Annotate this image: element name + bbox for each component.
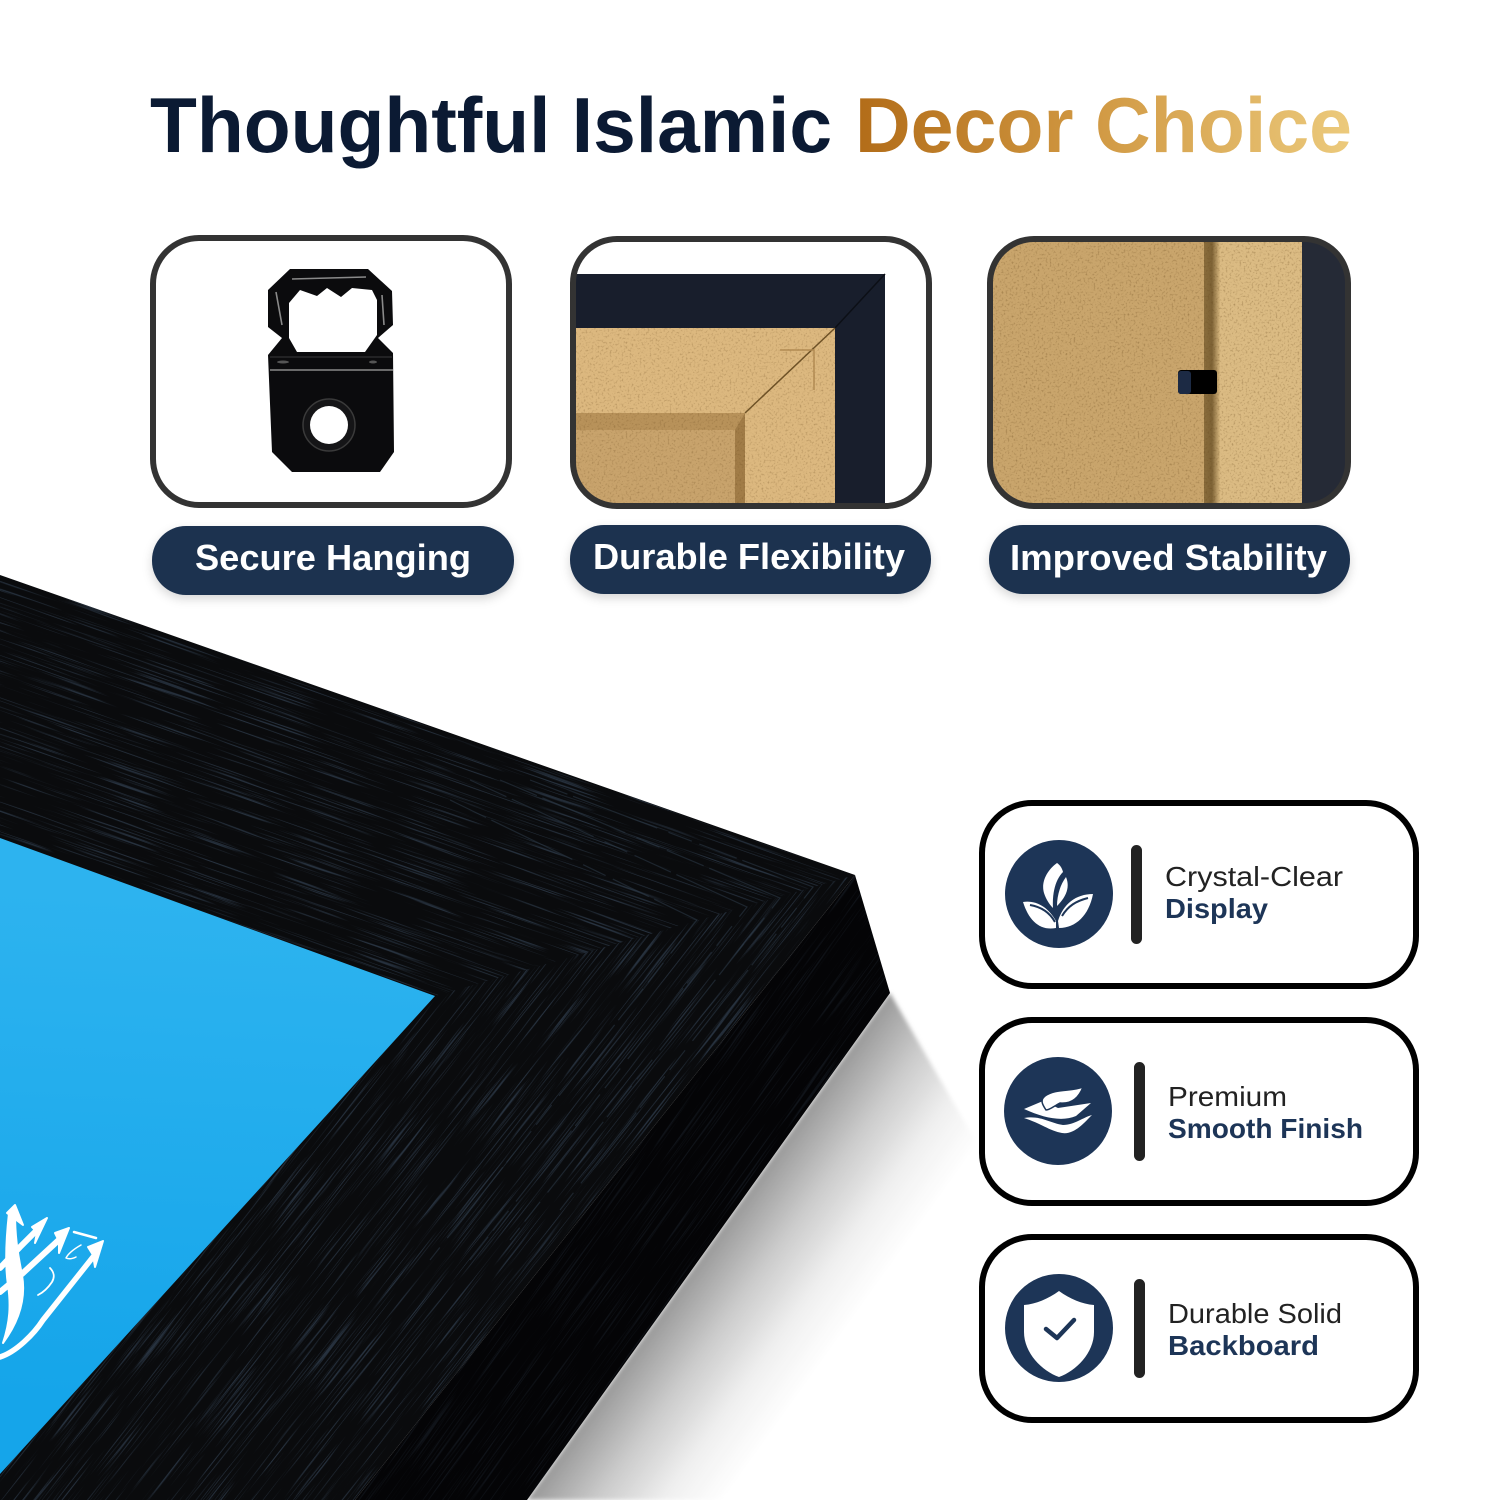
label: Durable Flexibility: [570, 525, 931, 594]
icon: hanger clip: [1178, 370, 1217, 394]
panel: improved stability photo: [990, 236, 1351, 509]
frame shadow: [527, 993, 975, 1500]
panel: premium smooth finish: [982, 1020, 1416, 1203]
artwork: white calligraphy: [0, 1205, 103, 1357]
label: Improved Stability: Improved Stability: [1010, 537, 1327, 578]
panel: premium smooth finish: Smooth Finish: [1168, 1113, 1363, 1144]
icon: smooth layers: [1004, 1057, 1112, 1165]
panel: durable solid backboard: Backboard: [1168, 1330, 1319, 1361]
panel: durable flexibility photo: [570, 239, 929, 509]
panel: premium smooth finish: Premium: [1168, 1081, 1287, 1112]
black picture frame corner: [0, 575, 890, 1500]
title: Decor Choice: [855, 81, 1352, 169]
panel: durable solid backboard: [982, 1237, 1416, 1420]
panel: crystal-clear display: [982, 803, 1416, 986]
panel: crystal-clear display: Crystal-Clear: [1165, 861, 1343, 892]
label: Improved Stability: [989, 525, 1350, 594]
panel: crystal-clear display: Display: [1165, 893, 1268, 924]
icon: shield check: [1005, 1274, 1113, 1382]
panel: durable solid backboard: Durable Solid: [1168, 1298, 1342, 1329]
label: Secure Hanging: Secure Hanging: [195, 537, 471, 578]
icon: leaves: [1005, 840, 1113, 948]
panel: secure hanging photo: [153, 238, 509, 505]
label: Durable Flexibility: Durable Flexibility: [593, 536, 905, 577]
artwork: blue print: [0, 838, 435, 1474]
title: Thoughtful Islamic: [150, 81, 832, 169]
title: [150, 81, 1352, 169]
icon: sawtooth hanger: [268, 269, 394, 472]
label: Secure Hanging: [152, 526, 514, 595]
